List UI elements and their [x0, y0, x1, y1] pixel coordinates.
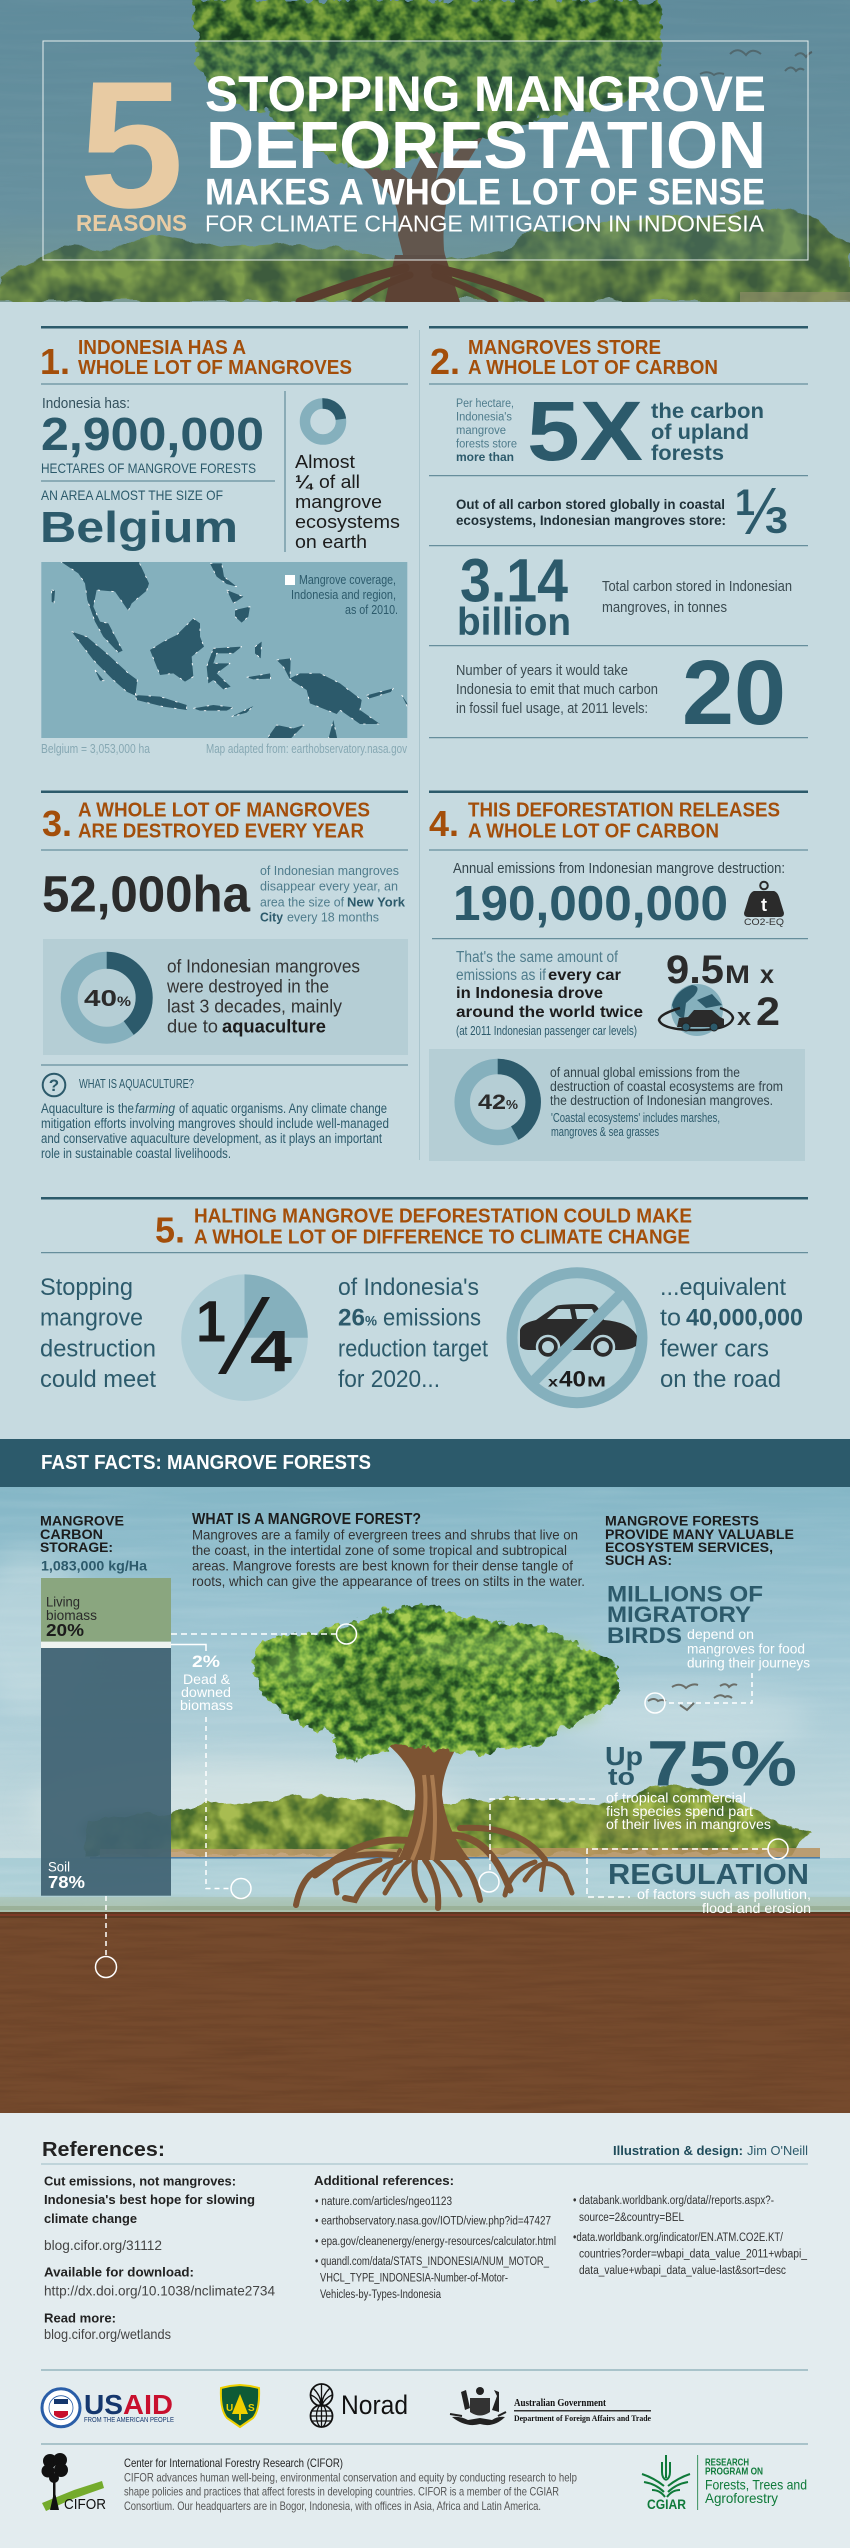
- additional references: data_value+wbapi_data_value-last&sort=desc: [579, 2265, 786, 2277]
- section 1 heading: WHOLE LOT OF MANGROVES: [78, 357, 352, 379]
- design credit: Illustration & design:: [613, 2143, 743, 2158]
- section 4 heading: A WHOLE LOT OF CARBON: [468, 821, 719, 843]
- graphic: 9.5M cars around globe twice: 2: [756, 990, 780, 1034]
- additional references: VHCL_TYPE_INDONESIA-Number-of-Motor-: [320, 2273, 508, 2285]
- service: regulation: of factors such as pollution,: [637, 1886, 811, 1902]
- bar heading: [40, 1514, 148, 1574]
- section 4 heading: 4.: [429, 803, 459, 844]
- donut chart: 42 percent: [462, 1066, 533, 1138]
- section 1 heading: 1.: [40, 341, 70, 382]
- main title: MAKES A WHOLE LOT OF SENSE: [205, 172, 765, 212]
- logo: USAID: AID: [123, 2389, 173, 2420]
- panel: section 2 carbon storage: [429, 326, 808, 744]
- section 5 heading: [155, 1206, 692, 1251]
- label: dead and downed biomass: downed: [181, 1685, 231, 1700]
- map legend: Indonesia and region,: [291, 587, 396, 602]
- graphic: 9.5M cars around globe twice: M: [725, 961, 750, 989]
- stat: 20 years: Number of years it would take: [456, 662, 628, 679]
- stat: one third: 3: [765, 500, 788, 541]
- additional references: • databank.worldbank.org/data//reports.aspx?-: [573, 2195, 774, 2207]
- logo: USAID: FROM THE AMERICAN PEOPLE: [84, 2415, 174, 2424]
- logo: Australian Government: [450, 2387, 651, 2425]
- fast facts banner: [0, 1439, 850, 1487]
- stat: 20 years: [456, 642, 786, 744]
- page background: [0, 302, 850, 1439]
- logo: CIFOR: [42, 2453, 106, 2513]
- logo: CGIAR research program: Forests, Trees and: [705, 2476, 807, 2492]
- map legend: Mangrove coverage,: [299, 572, 396, 587]
- text: emissions target: reduction target: [338, 1336, 488, 1363]
- text: almost a quarter: on earth: [295, 531, 367, 552]
- text: ecosystem services heading: PROVIDE MANY VALUABLE: [605, 1527, 794, 1542]
- section 3 heading: 3.: [42, 803, 72, 844]
- pie chart: one quarter: 1: [196, 1290, 226, 1355]
- birds: [648, 1684, 737, 1710]
- donut chart: one quarter: [305, 404, 341, 440]
- logo: USAID: [42, 2389, 174, 2427]
- service: fish species: 75%: [647, 1728, 797, 1800]
- donut chart: 40 percent: 40: [84, 985, 117, 1011]
- aquaculture explainer: [41, 1074, 389, 1161]
- text: almost a quarter: mangrove: [295, 491, 382, 512]
- stat: hectares: Belgium: [40, 503, 238, 552]
- main title: STOPPING MANGROVE: [205, 66, 766, 122]
- stat: five times upland: forests store: [456, 438, 517, 450]
- stat: 52,000 ha: disappear every year, an: [260, 879, 398, 894]
- text: ecosystem services heading: SUCH AS:: [605, 1553, 672, 1568]
- stat: one third: ecosystems, Indonesian mangroves store:: [456, 513, 726, 528]
- service: migratory birds: BIRDS: [607, 1623, 682, 1648]
- main references: Cut emissions, not mangroves:: [44, 2174, 236, 2189]
- map footnotes: Belgium = 3,053,000 ha: [41, 742, 150, 756]
- stat: hectares: [40, 396, 275, 552]
- main title: DEFORESTATION: [206, 108, 766, 183]
- stat: five times upland: [456, 384, 764, 478]
- callout connectors: [96, 1624, 788, 1978]
- text: emissions target: 26: [338, 1305, 365, 1332]
- section 1 heading: INDONESIA HAS A: [78, 337, 246, 359]
- text: equivalent cars: [660, 1274, 803, 1393]
- text: emissions target: emissions: [383, 1305, 481, 1332]
- bar chart: carbon storage: Soil: [48, 1860, 70, 1875]
- icon: no car x40M: x: [548, 1374, 558, 1390]
- service: fish species: [605, 1728, 797, 1832]
- stat: 3.14 billion: 3.14: [460, 546, 568, 614]
- text: what is a mangrove forest: [192, 1511, 585, 1589]
- main references: [44, 2174, 275, 2342]
- stat: five times upland: the carbon: [651, 400, 764, 423]
- text: about CIFOR: shape policies and practices that affect forests in developing countries. CIFOR is a member of the CGIAR: [124, 2485, 559, 2499]
- text: stopping destruction: mangrove: [40, 1305, 143, 1332]
- service: regulation: [608, 1859, 811, 1916]
- text: equivalent cars: fewer cars: [660, 1336, 769, 1363]
- aquaculture explainer: of aquatic organisms. Any climate change: [179, 1101, 387, 1116]
- logo: CGIAR research program: PROGRAM ON: [705, 2467, 763, 2478]
- panel: section 1 mangrove extent: [40, 326, 408, 756]
- main references: blog.cifor.org/wetlands: [44, 2326, 171, 2342]
- bar chart: carbon storage: 20%: [46, 1620, 84, 1640]
- water: [0, 1857, 850, 1917]
- logo: CGIAR research program: CGIAR: [647, 2496, 686, 2512]
- donut chart: 42 percent: %: [506, 1097, 518, 1112]
- map footnotes: Map adapted from: earthobservatory.nasa.gov: [206, 742, 408, 756]
- section 5 heading: 5.: [155, 1210, 185, 1251]
- pie chart: one quarter: [181, 1274, 308, 1401]
- callout: 40 percent: due to: [167, 1017, 218, 1037]
- references heading: References:: [42, 2139, 165, 2161]
- graphic: 9.5M cars around globe twice: [659, 948, 780, 1036]
- stat: five times upland: of upland: [651, 421, 749, 444]
- logo: US Forest Service: U: [226, 2403, 233, 2414]
- icon: weight: [744, 882, 784, 928]
- donut chart: 42 percent: 42: [478, 1091, 506, 1114]
- stat: 52,000 ha: New York: [347, 895, 406, 910]
- text: ecosystem services heading: MANGROVE FORESTS: [605, 1514, 759, 1529]
- stat: 52,000 ha: of Indonesian mangroves: [260, 863, 399, 878]
- section 2 heading: 2.: [430, 341, 460, 382]
- bar heading: 1,083,000 kg/Ha: [41, 1559, 148, 1574]
- text: same as every car: emissions as if: [456, 967, 547, 984]
- logo: Norad: [310, 2384, 408, 2427]
- text: emissions target: of Indonesia's: [338, 1274, 479, 1301]
- stat: five times upland: forests: [651, 442, 724, 465]
- logo: Australian Government: Department of Foreign Affairs and Trade: [514, 2414, 651, 2423]
- section 3 heading: ARE DESTROYED EVERY YEAR: [78, 821, 365, 843]
- text: same as every car: (at 2011 Indonesian passenger car levels): [456, 1024, 637, 1038]
- stat: one third: [456, 482, 788, 541]
- donut chart: 40 percent: [69, 960, 144, 1035]
- bar chart: carbon storage: 78%: [48, 1872, 85, 1892]
- stat: five times upland: mangrove: [456, 425, 506, 437]
- label: dead and downed biomass: 2%: [192, 1652, 220, 1671]
- stat: annual emissions: Annual emissions from Indonesian mangrove destruction:: [453, 860, 785, 877]
- section 2 heading: [430, 337, 718, 382]
- section 3 heading: [42, 800, 370, 844]
- callout: 42 percent: mangroves & sea grasses: [551, 1125, 659, 1139]
- text: almost a quarter: Almost: [295, 451, 355, 472]
- stat: 20 years: 20: [682, 642, 786, 744]
- background islands: [80, 1785, 820, 1858]
- graphic: 9.5M cars around globe twice: x: [737, 1004, 752, 1031]
- stat: annual emissions: [453, 860, 785, 931]
- header banner: [0, 0, 850, 302]
- text: about CIFOR: CIFOR advances human well-being, environmental conservation and equity by conducting research to help: [124, 2471, 577, 2485]
- stat: 3.14 billion: Total carbon stored in Indonesian: [602, 578, 792, 595]
- text: about CIFOR: Center for International Forestry Research (CIFOR): [124, 2456, 343, 2470]
- logo: CGIAR research program: [642, 2455, 807, 2512]
- mangrove tree: [253, 1605, 618, 1908]
- callout: 40 percent: last 3 decades, mainly: [167, 997, 342, 1017]
- text: same as every car: around the world twice: [456, 1004, 643, 1021]
- pie chart: one quarter: 4: [250, 1319, 292, 1384]
- map of Indonesia: [41, 561, 407, 739]
- section 2 heading: A WHOLE LOT OF CARBON: [468, 357, 718, 379]
- additional references: • nature.com/articles/ngeo1123: [315, 2196, 452, 2208]
- stat: five times upland: Indonesia's: [456, 412, 512, 424]
- text: same as every car: [456, 949, 643, 1038]
- map footnotes: [41, 742, 408, 756]
- bar heading: STORAGE:: [40, 1540, 113, 1555]
- section 2 heading: MANGROVES STORE: [468, 337, 661, 359]
- text: ecosystem services heading: [605, 1514, 794, 1568]
- additional references: source=2&country=BEL: [579, 2212, 685, 2224]
- bar heading: MANGROVE: [40, 1514, 124, 1529]
- text: about CIFOR: Consortium. Our headquarters are in Bogor, Indonesia, with offices in Asia, Africa and Latin America.: [124, 2499, 541, 2513]
- bar chart: carbon storage: Living: [46, 1595, 80, 1610]
- graphic: 9.5M cars around globe twice: 9.5: [666, 948, 724, 992]
- text: almost a quarter: ¼: [295, 471, 314, 492]
- soil: [0, 1912, 850, 2113]
- aquaculture explainer: Aquaculture is the: [41, 1101, 134, 1116]
- graphic: 9.5M cars around globe twice: x: [760, 961, 774, 989]
- section 4 heading: [429, 800, 780, 844]
- section 4 heading: THIS DEFORESTATION RELEASES: [468, 800, 780, 822]
- main references: climate change: [44, 2211, 137, 2226]
- stat: 52,000 ha: area the size of: [260, 895, 344, 910]
- callout: 40 percent: were destroyed in the: [166, 977, 329, 997]
- text: about CIFOR: [124, 2456, 577, 2513]
- main title: [205, 66, 766, 236]
- text: same as every car: every car: [548, 967, 621, 984]
- text: equivalent cars: 40,000,000: [686, 1305, 803, 1332]
- logo: Australian Government: Australian Government: [514, 2397, 606, 2409]
- service: fish species: fish species spend part: [606, 1803, 753, 1819]
- main references: Read more:: [44, 2311, 116, 2326]
- main references: http://dx.doi.org/10.1038/nclimate2734: [44, 2283, 275, 2299]
- logo: CIFOR: CIFOR: [64, 2496, 106, 2513]
- section 5 heading: HALTING MANGROVE DEFORESTATION COULD MAKE: [194, 1206, 692, 1228]
- text: stopping destruction: Stopping: [40, 1274, 133, 1301]
- birds: [700, 50, 812, 75]
- illustrated scene: mangrove forest: [0, 1487, 850, 2113]
- stat: 52,000 ha: every 18 months: [287, 910, 379, 925]
- icon: weight: CO2-EQ: [744, 917, 784, 928]
- icon: no car x40M: M: [587, 1374, 606, 1391]
- icon: weight: t: [761, 895, 767, 915]
- bar chart: carbon storage: [41, 1578, 171, 1896]
- stat: five times upland: more than: [456, 452, 514, 464]
- logo: CGIAR research program: Agroforestry: [705, 2490, 778, 2506]
- logo: Norad: Norad: [341, 2390, 408, 2420]
- aquaculture explainer: and conservative aquaculture development, as it plays an important: [41, 1131, 382, 1146]
- aquaculture explainer: WHAT IS AQUACULTURE?: [79, 1076, 194, 1091]
- map legend: as of 2010.: [345, 602, 398, 617]
- text: emissions target: for 2020...: [338, 1366, 440, 1393]
- main references: blog.cifor.org/31112: [44, 2237, 162, 2253]
- icon: no car x40M: 40: [559, 1367, 586, 1392]
- service: migratory birds: mangroves for food: [687, 1640, 805, 1656]
- additional references: • quandl.com/data/STATS_INDONESIA/NUM_MOTOR_: [315, 2256, 549, 2268]
- additional references: [314, 2173, 808, 2301]
- callout: 42 percent: the destruction of Indonesian mangroves.: [550, 1093, 773, 1108]
- main references: Indonesia's best hope for slowing: [44, 2192, 255, 2207]
- service: fish species: of their lives in mangroves: [606, 1816, 771, 1832]
- bar heading: CARBON: [40, 1527, 103, 1542]
- service: regulation: REGULATION: [608, 1859, 809, 1891]
- text: same as every car: in Indonesia drove: [456, 985, 603, 1002]
- main title: FOR CLIMATE CHANGE MITIGATION IN INDONESIA: [205, 210, 765, 236]
- icon: question mark: [43, 1074, 65, 1096]
- additional references: • earthobservatory.nasa.gov/IOTD/view.php?id=47427: [315, 2216, 551, 2228]
- service: regulation: flood and erosion: [702, 1900, 811, 1916]
- design credit: Jim O'Neill: [747, 2143, 808, 2158]
- stat: one third: 1: [735, 482, 755, 523]
- callout: 40 percent: of Indonesian mangroves: [167, 957, 360, 977]
- stat: hectares: 2,900,000: [41, 408, 264, 460]
- service: migratory birds: during their journeys: [687, 1654, 810, 1670]
- text: what is a mangrove forest: Mangroves are a family of evergreen trees and shrubs that live on: [192, 1526, 578, 1542]
- text: almost a quarter: [295, 451, 400, 552]
- additional references: • epa.gov/cleanenergy/energy-resources/calculator.html: [315, 2236, 556, 2248]
- stat: hectares: Indonesia has:: [42, 396, 130, 412]
- stat: 3.14 billion: mangroves, in tonnes: [602, 599, 727, 616]
- additional references: countries?order=wbapi_data_value_2011+wbapi_: [579, 2249, 808, 2261]
- additional references: Additional references:: [314, 2173, 454, 2188]
- text: what is a mangrove forest: roots, which can give the appearance of trees on stilts in the water.: [192, 1573, 585, 1589]
- callout: 42 percent: of annual global emissions from the: [550, 1065, 740, 1080]
- map legend: [285, 572, 398, 617]
- text: equivalent cars: on the road: [660, 1366, 781, 1393]
- label: dead and downed biomass: [180, 1652, 233, 1713]
- panel: references: [0, 2113, 850, 2548]
- stat: five times upland: Per hectare,: [456, 398, 514, 410]
- text: what is a mangrove forest: the coast, in the intertidal zone of some tropical and subtropical: [192, 1542, 567, 1558]
- stat: 20 years: Indonesia to emit that much carbon: [456, 681, 658, 698]
- logo: US Forest Service: [221, 2385, 259, 2427]
- service: migratory birds: depend on: [687, 1626, 754, 1642]
- callout: 40 percent: aquaculture: [222, 1017, 326, 1037]
- text: equivalent cars: ...equivalent: [660, 1274, 786, 1301]
- text: emissions target: [338, 1274, 488, 1393]
- stat: hectares: HECTARES OF MANGROVE FORESTS: [41, 460, 256, 476]
- main references: Available for download:: [44, 2265, 194, 2280]
- title frame: [43, 41, 808, 260]
- aquaculture explainer: mitigation efforts involving mangroves should include well-managed: [41, 1116, 389, 1131]
- text: ecosystem services heading: ECOSYSTEM SERVICES,: [605, 1540, 773, 1555]
- stat: hectares: AN AREA ALMOST THE SIZE OF: [41, 487, 223, 503]
- icon: question mark: ?: [49, 1076, 59, 1095]
- stat: 3.14 billion: billion: [457, 601, 571, 644]
- stat: 52,000 ha: City: [260, 910, 284, 925]
- section 3 heading: A WHOLE LOT OF MANGROVES: [78, 800, 370, 822]
- text: stopping destruction: could meet: [40, 1366, 156, 1393]
- icon: no car x40M: [512, 1273, 642, 1403]
- aquaculture explainer: role in sustainable coastal livelihoods.: [41, 1146, 231, 1161]
- callout: 42 percent: destruction of coastal ecosystems are from: [550, 1079, 783, 1094]
- text: stopping destruction: [40, 1274, 156, 1393]
- label: dead and downed biomass: biomass: [180, 1698, 233, 1713]
- big number 5: 5: [79, 44, 184, 246]
- service: fish species: to: [608, 1764, 635, 1791]
- text: what is a mangrove forest: areas. Mangrove forests are best known for their dense tangle of: [192, 1558, 573, 1574]
- logo: CGIAR research program: RESEARCH: [705, 2458, 749, 2469]
- section 1 heading: [40, 337, 352, 382]
- text: almost a quarter: ecosystems: [295, 511, 400, 532]
- panel: section 4 emissions: [429, 790, 808, 1161]
- section 5 heading: A WHOLE LOT OF DIFFERENCE TO CLIMATE CHANGE: [194, 1226, 690, 1248]
- fast facts banner: FAST FACTS: MANGROVE FORESTS: [41, 1452, 371, 1474]
- logo: USAID: US: [84, 2389, 123, 2420]
- callout: 40 percent: [43, 939, 408, 1055]
- logo: US Forest Service: S: [248, 2403, 255, 2414]
- stat: 52,000 ha: [42, 863, 406, 925]
- stat: 3.14 billion: [457, 546, 792, 644]
- reasons label: REASONS: [76, 210, 187, 236]
- service: migratory birds: MILLIONS OF: [607, 1582, 763, 1607]
- service: migratory birds: [607, 1582, 810, 1670]
- stat: five times upland: 5X: [527, 384, 643, 478]
- text: what is a mangrove forest: WHAT IS A MANGROVE FOREST?: [192, 1511, 421, 1528]
- text: emissions target: %: [365, 1313, 378, 1329]
- design credit: [613, 2143, 808, 2158]
- stat: annual emissions: 190,000,000: [453, 877, 728, 931]
- bar chart: carbon storage: biomass: [46, 1608, 97, 1623]
- service: migratory birds: MIGRATORY: [607, 1602, 751, 1627]
- aquaculture explainer: farming: [135, 1101, 175, 1116]
- label: dead and downed biomass: Dead &: [183, 1672, 230, 1687]
- service: fish species: of tropical commercial: [606, 1790, 746, 1806]
- text: equivalent cars: to: [660, 1305, 681, 1332]
- additional references: •data.worldbank.org/indicator/EN.ATM.CO2E.KT/: [573, 2232, 784, 2244]
- text: same as every car: That's the same amount of: [456, 949, 619, 966]
- callout: 42 percent: [429, 1049, 805, 1161]
- stat: 20 years: in fossil fuel usage, at 2011 levels:: [456, 700, 648, 717]
- callout: 42 percent: 'Coastal ecosystems' includes marshes,: [551, 1111, 720, 1125]
- donut chart: 40 percent: %: [117, 993, 132, 1009]
- additional references: Vehicles-by-Types-Indonesia: [320, 2289, 441, 2301]
- panel: section 5 climate difference: [40, 1197, 808, 1403]
- text: almost a quarter: of all: [319, 471, 360, 492]
- stat: one third: Out of all carbon stored globally in coastal: [456, 497, 725, 512]
- text: stopping destruction: destruction: [40, 1336, 156, 1363]
- panel: section 3 destruction: [41, 790, 408, 1161]
- stat: 52,000 ha: 52,000ha: [42, 866, 251, 923]
- service: fish species: Up: [605, 1741, 643, 1771]
